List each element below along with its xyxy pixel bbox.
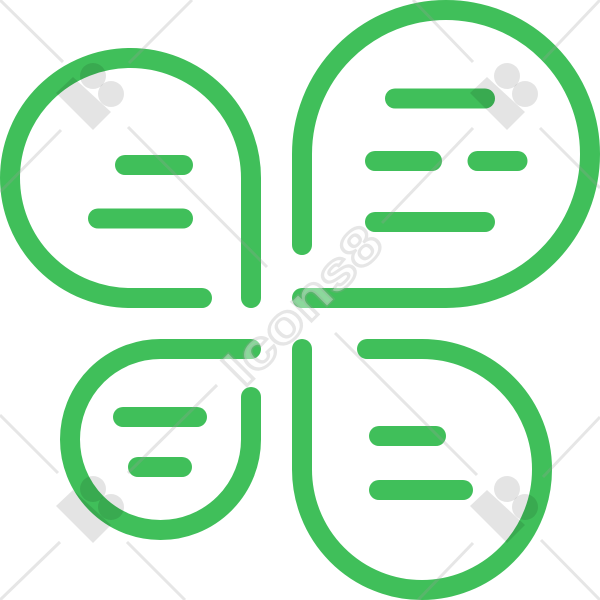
icon: bottom-right speech bubble leaf xyxy=(302,349,542,590)
icon: top-right speech bubble leaf xyxy=(302,10,590,298)
watermark: bottom-left logo xyxy=(56,476,124,543)
watermark: top-right logo xyxy=(470,63,538,130)
icon: bottom-left speech bubble leaf xyxy=(70,349,251,530)
watermark: top-left logo xyxy=(56,63,124,130)
watermark: Icons8 text: Icons8 xyxy=(212,214,394,397)
watermark: bottom-right logo xyxy=(470,476,538,543)
icon: top-left speech bubble leaf xyxy=(10,58,251,298)
